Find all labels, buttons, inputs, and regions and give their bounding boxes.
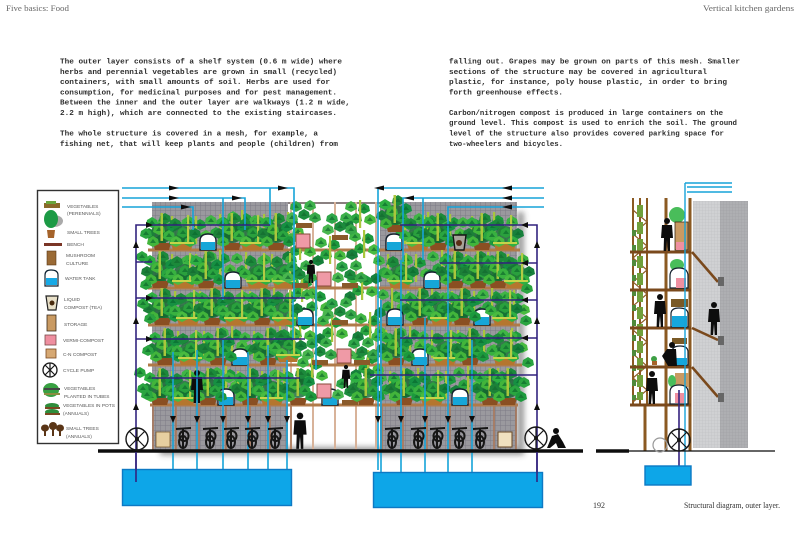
- mesh wall: left block: [152, 202, 288, 450]
- section people: [646, 218, 720, 404]
- cycle pump: left: [126, 428, 148, 450]
- existing building wall: dark strip: [720, 201, 748, 448]
- text block: left column: fishing net, that will keep plants and people (children) from: [60, 141, 338, 149]
- text block: right column: falling out. Grapes may be grown on parts of this mesh. Smaller: [449, 58, 740, 66]
- tank and compost: floor 5: [668, 373, 689, 404]
- page header: right: Vertical kitchen gardens: [703, 3, 794, 13]
- legend: water tank: WATER TANK: [65, 276, 96, 282]
- page number: 192: [593, 501, 605, 510]
- existing building wall: [693, 201, 721, 448]
- legend: bench: [44, 242, 84, 248]
- compost box: right: [498, 432, 512, 447]
- legend: small trees annuals: SMALL TREES: [66, 426, 99, 432]
- legend: liquid compost: COMPOST (TEA): [64, 305, 102, 311]
- text block: left column: Between the inner and the outer layer are walkways (1.2 m wide,: [60, 100, 350, 108]
- legend: mushroom culture: MUSHROOM: [66, 253, 95, 259]
- legend: vegetables in pots: (ANNUALS): [63, 411, 89, 417]
- water tank: left: [122, 470, 292, 506]
- floors: [630, 252, 691, 405]
- bicycles: right bay: [385, 428, 488, 448]
- legend: vegetables in tubes: [43, 383, 110, 400]
- central void: [288, 202, 380, 450]
- posts: [645, 198, 690, 451]
- plants: floor 4: [142, 327, 524, 365]
- section pipes: [678, 390, 680, 466]
- legend: vegetables in pots: [45, 403, 115, 417]
- purple pipe arrowheads: [133, 222, 540, 410]
- legend: small trees: [44, 210, 100, 238]
- page header: left: Five basics: Food: [6, 3, 70, 13]
- plants: floor 2: [140, 251, 535, 294]
- legend: mushroom culture: [47, 251, 95, 267]
- liquid compost tub: [453, 235, 466, 250]
- person pedalling pump: [547, 428, 566, 448]
- legend: [38, 190, 118, 444]
- people among the shelves: [191, 260, 350, 403]
- purple return pipes: [136, 225, 537, 482]
- text block: right column: Carbon/nitrogen compost is produced in large containers on the: [449, 110, 723, 118]
- text block: right column: sections of the structure may be covered in agricultural: [449, 69, 707, 77]
- text block: right column: two-wheelers and bicycles.: [449, 141, 563, 149]
- shelves: [148, 250, 522, 405]
- legend: small trees annuals: (ANNUALS): [66, 434, 92, 440]
- section cycle pump: [653, 429, 690, 452]
- legend: bench: BENCH: [67, 242, 84, 248]
- legend: storage: [47, 315, 87, 331]
- legend: cycle pump: CYCLE PUMP: [63, 368, 94, 374]
- text block: right column: plastic, for instance, poly house plastic, in order to bring: [449, 79, 727, 87]
- water tank: right: [374, 472, 542, 508]
- water tank: floor 3: [671, 299, 688, 327]
- legend: vegetables in pots: VEGETABLES IN POTS: [63, 403, 115, 409]
- mesh trellis with climbers: [633, 198, 647, 405]
- text block: right column: level of the structure also provides covered parking space for: [449, 130, 724, 138]
- text block: right column: ground level. This compost is used to enrich the soil. The ground: [449, 120, 737, 128]
- caption: Structural diagram, outer layer.: [684, 501, 780, 510]
- person standing at ground level: [293, 413, 307, 449]
- structural section diagram: [596, 183, 775, 485]
- text block: right column: [449, 58, 740, 149]
- plants: floor 3: [137, 288, 532, 326]
- text block: left column: [60, 58, 350, 149]
- legend: vermi-compost: VERMI-COMPOST: [63, 338, 104, 344]
- legend: mushroom culture: CULTURE: [66, 261, 88, 267]
- legend: vegetables in tubes: VEGETABLES: [64, 386, 95, 392]
- compost box: left: [156, 432, 170, 447]
- legend: c-n compost: [46, 349, 97, 358]
- text block: left column: 2.2 m high), which are connected to the existing staircases.: [60, 110, 337, 118]
- legend: small trees: SMALL TREES: [67, 230, 100, 236]
- legend: liquid compost: [46, 296, 102, 311]
- cyan pipe arrowheads: [169, 186, 512, 423]
- plants: floor 1: [136, 195, 524, 262]
- cyan water pipes: [122, 188, 544, 472]
- section ground line: [596, 449, 775, 453]
- legend: vegetables perennials: [44, 201, 101, 217]
- main elevation: vertical kitchen garden: [98, 186, 583, 508]
- mesh wall: right block: [380, 202, 517, 450]
- legend: water tank: [45, 270, 96, 286]
- text block: right column: forth greenhouse effects.: [449, 90, 563, 98]
- stairs: [692, 252, 718, 397]
- legend: c-n compost: C-N COMPOST: [63, 352, 97, 358]
- stair landings: [718, 277, 724, 402]
- tanks and compost behind the plants: [200, 234, 490, 405]
- ground floor posts: [153, 405, 516, 450]
- legend: cycle pump: [43, 363, 94, 377]
- water tank and seated worker: floor 4: [651, 338, 688, 366]
- legend: small trees annuals: [41, 422, 99, 440]
- background foliage filling the shelves: [154, 200, 530, 401]
- plants: floor 5: [134, 357, 534, 405]
- text block: left column: The outer layer consists of a shelf system (0.6 m wide) where: [60, 58, 342, 66]
- legend: vegetables in tubes: PLANTED IN TUBES: [64, 394, 110, 400]
- ground line: [98, 449, 583, 453]
- legend: liquid compost: LIQUID: [64, 297, 81, 303]
- cycle pump: right: [525, 427, 547, 449]
- pump risers in tanks: [136, 452, 537, 482]
- text block: left column: The whole structure is covered in a mesh, for example, a: [60, 130, 318, 138]
- text block: left column: consumption, for medicinal purposes and for pest management.: [60, 90, 337, 98]
- text block: left column: containers, with small amounts of soil. Herbs are used for: [60, 79, 330, 87]
- text block: left column: herbs and perennial vegetables are grown in small (recycled): [60, 69, 337, 77]
- vermi-compost boxes: [296, 234, 351, 398]
- bicycles: left bay: [176, 428, 283, 448]
- tank and vermi-compost: floor 2: [670, 259, 688, 288]
- legend: vermi-compost: [45, 335, 104, 345]
- legend: vegetables perennials: VEGETABLES: [67, 204, 98, 210]
- legend: vegetables perennials: (PERENNIALS): [67, 211, 101, 217]
- legend: storage: STORAGE: [64, 322, 87, 328]
- section water tank: [645, 466, 691, 485]
- plants and storage: floor 1: [669, 207, 688, 250]
- building shadow: [160, 212, 524, 455]
